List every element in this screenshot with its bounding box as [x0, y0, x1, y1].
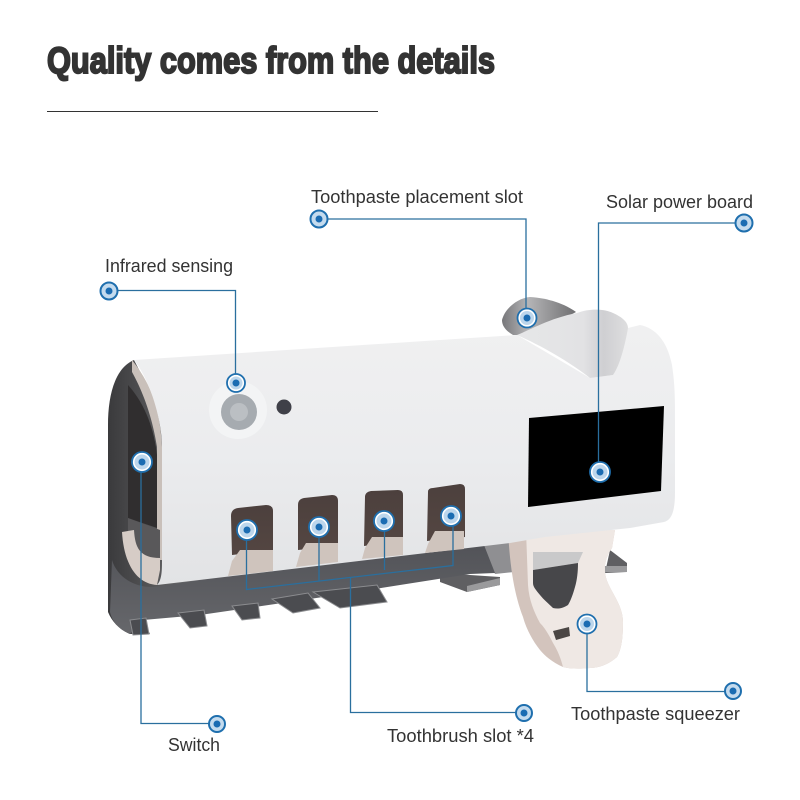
marker: toothbrush slot label dot: [516, 705, 532, 721]
marker: solar board: [590, 462, 610, 482]
infrared sensor: [209, 381, 267, 439]
label: switch: Switch: [168, 735, 220, 755]
marker: slot 1: [237, 520, 257, 540]
toothpaste holder: [502, 297, 576, 335]
indicator light: [276, 400, 292, 414]
slots: [231, 484, 465, 555]
label: infrared sensing: Infrared sensing: [105, 256, 233, 276]
marker: squeezer: [578, 614, 596, 634]
marker: toothpaste slot: [518, 308, 536, 328]
base plate: [110, 540, 495, 634]
slot ledges: [228, 531, 464, 576]
squeezer opening: [533, 563, 578, 609]
marker: slot 4: [441, 506, 461, 526]
label: solar power board: Solar power board: [606, 192, 753, 212]
marker: infrared sensing label dot: [100, 282, 118, 300]
marker: switch: [132, 452, 152, 472]
squeezer mechanism: [533, 552, 583, 570]
marker: slot 3: [374, 511, 394, 531]
marker: squeezer label dot: [725, 683, 741, 699]
marker: infrared sensor: [227, 374, 245, 392]
wall bracket right: [440, 550, 627, 592]
marker: slot 2: [309, 517, 329, 537]
marker: solar label dot: [736, 214, 752, 232]
notch: [517, 310, 628, 378]
roller behind squeezer: [478, 540, 515, 574]
inner cavity left: [128, 385, 157, 528]
label: toothpaste placement slot: Toothpaste placement slot: [311, 187, 523, 207]
inner rim left: [132, 360, 162, 560]
label: toothbrush slot: Toothbrush slot *4: [387, 726, 534, 746]
main body: [134, 325, 675, 585]
marker: toothpaste slot label dot: [310, 210, 328, 228]
product illustration: toothbrush holder: [108, 297, 675, 669]
toothpaste squeezer: [508, 530, 623, 669]
feet: [130, 585, 387, 635]
callout lines: [109, 219, 744, 724]
clip left: [122, 530, 160, 585]
marker: switch label dot: [209, 716, 225, 732]
label: toothpaste squeezer: Toothpaste squeezer: [571, 704, 740, 724]
back plate: [108, 360, 400, 634]
solar power board: [528, 406, 664, 507]
title: Quality comes from the details: [47, 40, 495, 81]
